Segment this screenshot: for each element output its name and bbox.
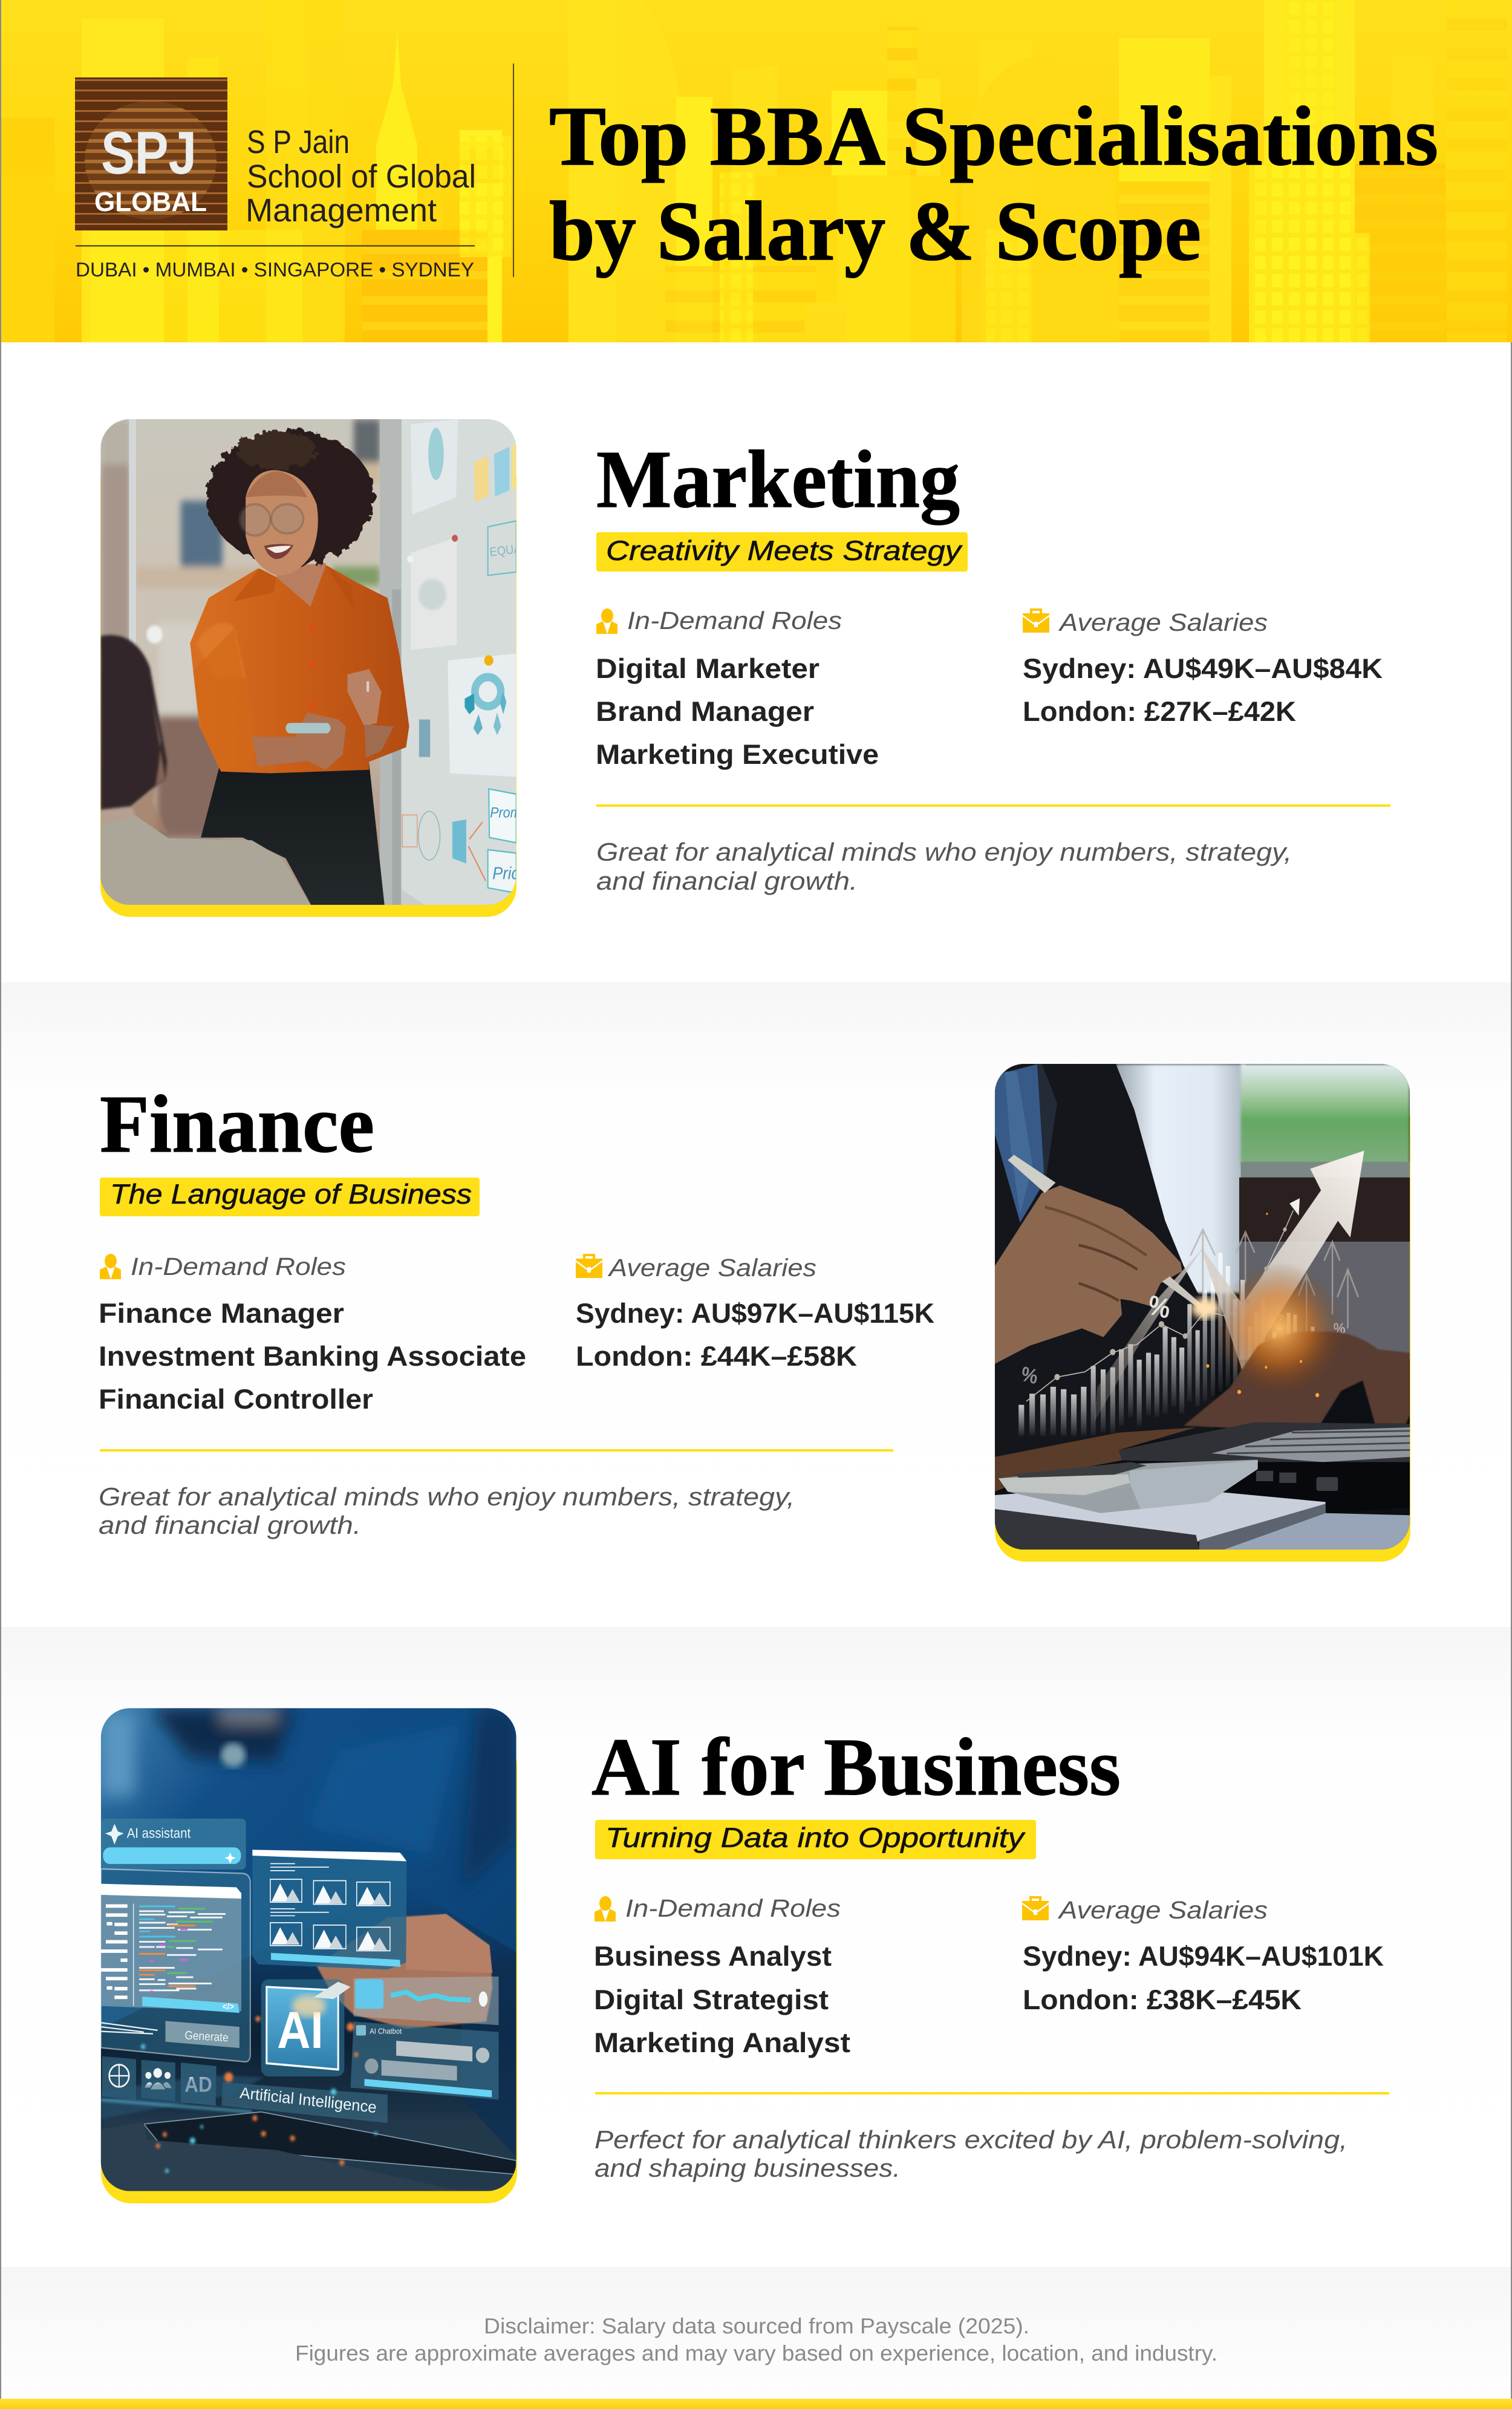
salaries column — [576, 1254, 934, 1372]
roles column — [99, 1253, 526, 1415]
salaries column: Average Salaries — [1058, 608, 1268, 636]
logo: SPJ Global: SPJ — [101, 119, 197, 187]
salaries column — [1022, 1896, 1384, 2015]
photo: AI dashboard: </> — [223, 2001, 234, 2012]
roles column: Marketing Analyst — [594, 2027, 850, 2058]
photo: finance chart and laptop: % — [1145, 1289, 1173, 1325]
school name — [246, 124, 476, 229]
roles column: Investment Banking Associate — [99, 1340, 526, 1372]
salaries column: Sydney: AU$94K–AU$101K — [1023, 1940, 1384, 1972]
note — [99, 1482, 795, 1539]
title: by Salary & Scope — [549, 184, 1201, 278]
roles column: Digital Marketer — [596, 653, 820, 684]
bottom yellow bar — [0, 2399, 1512, 2409]
tagline pill — [596, 532, 968, 572]
photo: marketing presenter: Price — [492, 864, 527, 883]
section backgrounds — [0, 982, 1512, 2399]
note: Great for analytical minds who enjoy numbers, strategy, — [596, 838, 1292, 866]
salaries column: Average Salaries — [1057, 1896, 1268, 1924]
logo: SPJ Global — [75, 77, 227, 230]
photo: AI dashboard: Generate — [184, 2029, 229, 2044]
tagline pill — [595, 1820, 1036, 1859]
disclaimer footer: Disclaimer: Salary data sourced from Payscale (2025). — [484, 2313, 1029, 2338]
salaries column: Sydney: AU$49K–AU$84K — [1023, 653, 1383, 684]
header banner with yellow skyline — [0, 0, 1512, 342]
roles column — [596, 607, 879, 770]
school name: School of Global — [247, 158, 476, 195]
roles column: Finance Manager — [99, 1297, 344, 1329]
note: Perfect for analytical thinkers excited by AI, problem-solving, — [595, 2125, 1347, 2154]
logo: SPJ Global: GLOBAL — [94, 186, 207, 217]
icon: briefcase — [1023, 610, 1049, 633]
tagline pill: The Language of Business — [110, 1178, 472, 1210]
photo: finance chart and laptop: % — [1334, 1320, 1346, 1337]
roles column: Marketing Executive — [596, 738, 879, 770]
photo: marketing presenter — [100, 419, 549, 917]
tagline pill: Creativity Meets Strategy — [606, 535, 963, 566]
icon: briefcase — [576, 1255, 602, 1278]
disclaimer footer: Figures are approximate averages and may vary based on experience, location, and industry. — [295, 2341, 1217, 2365]
roles column: In-Demand Roles — [625, 1894, 841, 1922]
roles column: Brand Manager — [596, 696, 814, 727]
photo: AI dashboard: Artificial Intelligence — [239, 2084, 377, 2116]
icon: person — [100, 1254, 121, 1279]
photo: AI dashboard: AD — [184, 2073, 212, 2097]
heading: AI for Business: AI for Business — [591, 1722, 1121, 1813]
salaries column: London: £44K–£58K — [576, 1340, 857, 1372]
icon: person — [595, 1896, 616, 1922]
photo: finance chart and laptop: % — [1273, 1308, 1283, 1323]
roles column: In-Demand Roles — [627, 607, 842, 634]
school name: Management — [246, 192, 437, 229]
photo: finance chart and laptop — [995, 1064, 1410, 1562]
roles column: In-Demand Roles — [131, 1253, 346, 1280]
photo: AI dashboard: AI Chatbot — [370, 2027, 402, 2035]
disclaimer footer — [295, 2313, 1217, 2365]
note: and financial growth. — [99, 1511, 361, 1539]
icon: briefcase — [1022, 1897, 1049, 1920]
heading: Finance: Finance — [100, 1079, 374, 1170]
salaries column — [1023, 608, 1383, 727]
salaries column: Average Salaries — [607, 1254, 816, 1282]
note: Great for analytical minds who enjoy numbers, strategy, — [99, 1482, 795, 1511]
note — [595, 2125, 1347, 2182]
title: Top BBA Specialisations — [549, 90, 1438, 183]
roles column: Business Analyst — [594, 1940, 832, 1972]
panel: finance — [99, 1064, 1410, 1562]
heading: Marketing: Marketing — [596, 434, 960, 526]
photo: AI dashboard: AI assistant — [127, 1825, 191, 1840]
note: and financial growth. — [596, 867, 858, 895]
icon: person — [596, 608, 618, 634]
photo: AI dashboard — [101, 1708, 517, 2203]
salaries column: London: £38K–£45K — [1023, 1984, 1302, 2015]
school name: S P Jain — [247, 124, 350, 160]
roles column — [594, 1894, 850, 2058]
photo: marketing presenter: EQUALITY — [489, 538, 545, 559]
title — [549, 90, 1438, 278]
photo: marketing presenter: Promotion — [490, 804, 549, 821]
photo: AI dashboard: AI — [277, 2001, 324, 2059]
panel: AI for business — [101, 1708, 1389, 2203]
salaries column: London: £27K–£42K — [1023, 696, 1296, 727]
roles column: Financial Controller — [99, 1383, 373, 1415]
roles column: Digital Strategist — [594, 1984, 829, 2015]
note: and shaping businesses. — [595, 2154, 901, 2182]
photo: finance chart and laptop: % — [1020, 1362, 1040, 1389]
salaries column: Sydney: AU$97K–AU$115K — [576, 1297, 934, 1329]
panel: marketing — [100, 419, 1390, 917]
campus cities: DUBAI • MUMBAI • SINGAPORE • SYDNEY — [76, 258, 474, 281]
note — [596, 838, 1292, 895]
tagline pill: Turning Data into Opportunity — [605, 1822, 1026, 1853]
